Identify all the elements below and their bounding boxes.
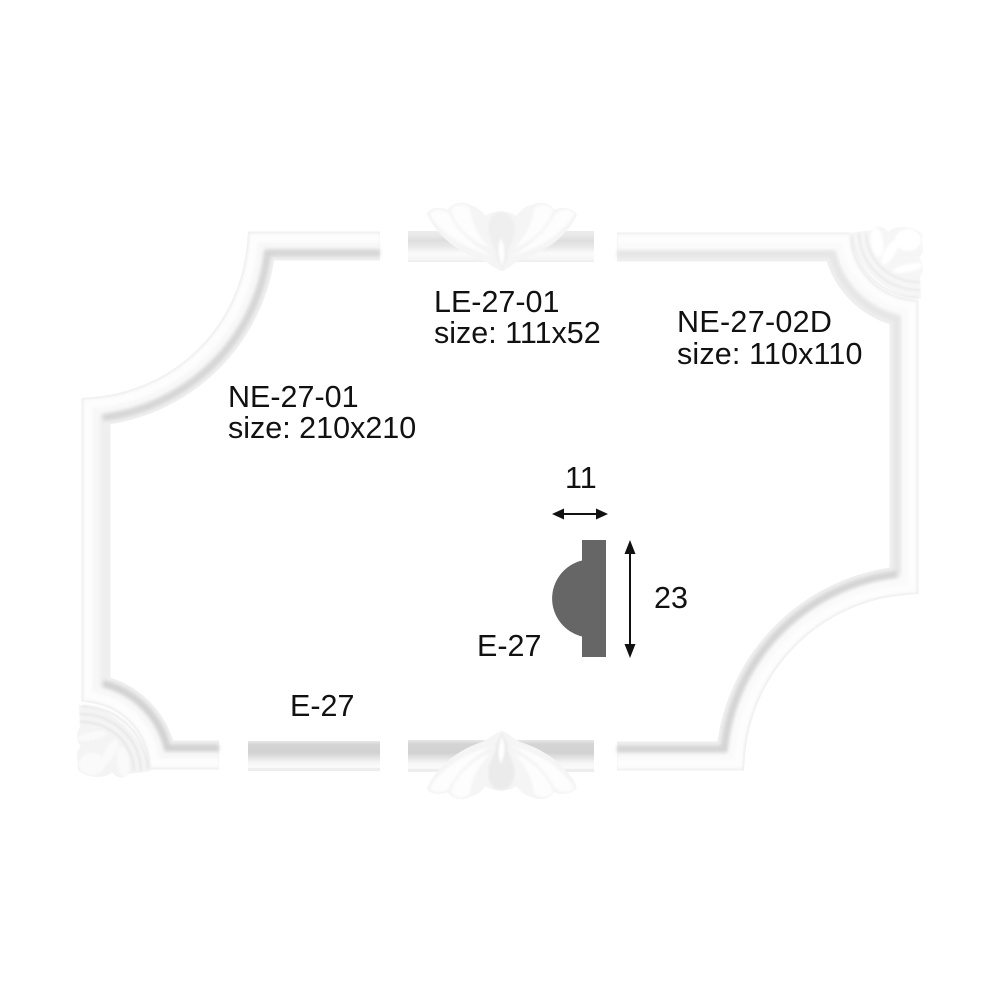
label: E-27 profile: E-27 [477,629,541,663]
moulding rail: bottom LE-27 section [408,740,594,772]
label: NE-27-02D: size: 110x110 [677,337,863,371]
profile cross-section E-27 [552,540,606,657]
dimension: width 11: 11 [565,461,597,495]
label: E-27 rail: E-27 [290,689,354,723]
label: NE-27-02D [677,305,863,371]
label: LE-27-01 [434,285,601,350]
label: NE-27-01 [228,380,416,445]
ornament: top right corner leaf [849,226,924,299]
moulding piece: NE-27-01 left frame section [89,239,380,762]
moulding piece: NE-27-02D right frame section [617,240,911,763]
ornament: top centre leaf [427,203,577,271]
label: LE-27-01: LE-27-01 [434,285,559,319]
moulding rail: E-27 straight section [248,741,380,771]
label: NE-27-01: NE-27-01 [228,380,359,414]
ornament: bottom left corner leaf [76,705,151,778]
moulding rail: top LE-27 section [408,231,594,262]
ornament: bottom centre leaf [427,731,577,799]
dimension: height 23: 23 [654,581,688,615]
dimension: height 23 [624,540,688,658]
label: LE-27-01: size: 111x52 [434,316,601,350]
dimension: width 11 [552,461,608,520]
label: NE-27-01: size: 210x210 [228,411,416,445]
label: NE-27-02D: NE-27-02D [677,305,832,339]
